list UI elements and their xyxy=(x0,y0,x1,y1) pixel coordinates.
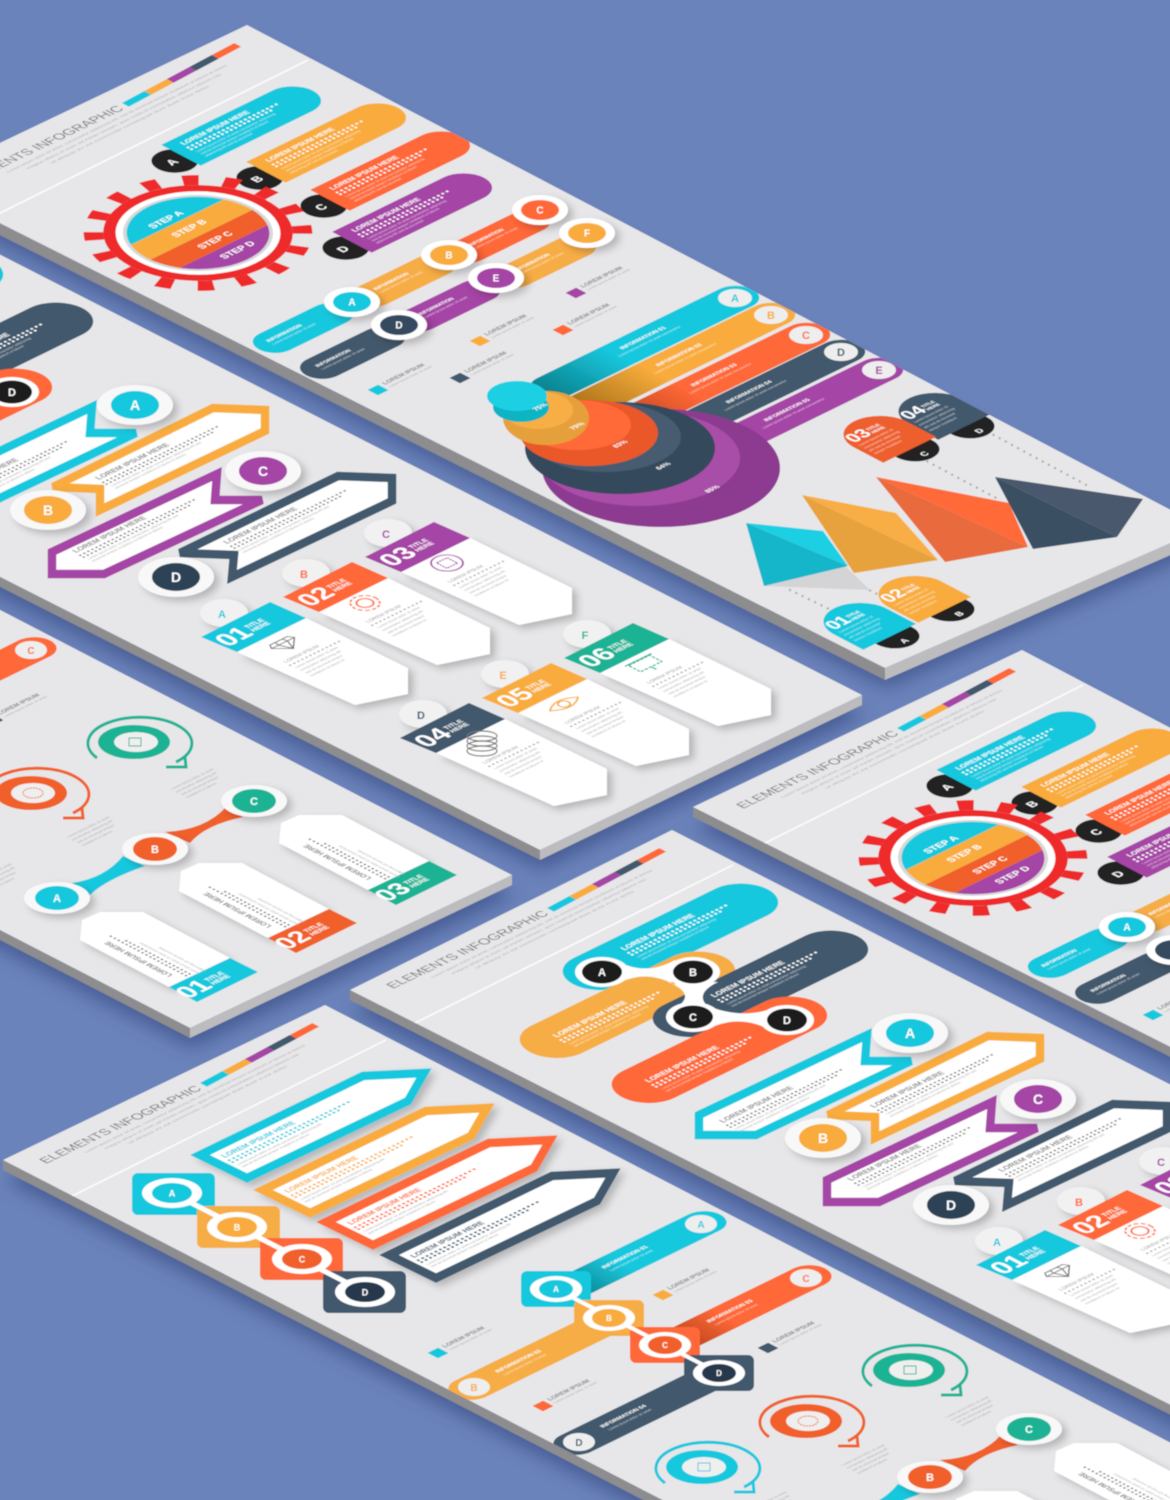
arrow banners xyxy=(200,1073,613,1278)
information bars: INFORMATION 04 xyxy=(599,1404,649,1429)
legends: Lorem ipsum dolor sit amet xyxy=(447,1328,494,1351)
pill: B: adipiscing elit sed do eiusmod xyxy=(288,149,339,174)
ribbons: Lorem ipsum dolor sit amet xyxy=(319,347,367,370)
card 06: 06 xyxy=(570,644,623,671)
card 05 xyxy=(481,660,689,766)
ribbon badges: A xyxy=(348,298,356,308)
card 05: HERE xyxy=(530,682,554,694)
tags: elit sed do eiusmod xyxy=(922,412,957,429)
pill: A xyxy=(136,80,333,178)
information bars: C xyxy=(802,1274,810,1285)
card 04: sed do eiusmod tempor xyxy=(502,755,544,775)
information bars: A xyxy=(697,1220,705,1231)
card 02: B xyxy=(300,569,308,581)
pill: A: adipiscing elit sed do eiusmod xyxy=(203,132,254,157)
panel: right sheet xyxy=(732,668,1170,1285)
tags: TITLE xyxy=(865,423,883,432)
tags: tempor incididunt xyxy=(927,416,959,432)
ribbons: INFORMATION xyxy=(265,324,304,343)
information bars: Lorem ipsum dolor sit amet consectetur xyxy=(722,379,789,411)
card 03: 03 xyxy=(371,543,424,570)
legends: Lorem ipsum dolor sit amet xyxy=(777,1323,824,1346)
card 03 xyxy=(364,519,572,625)
legends: LOREM IPSUM xyxy=(546,1379,592,1402)
card 01: LOREM IPSUM xyxy=(282,644,322,664)
tags: HERE xyxy=(870,425,888,434)
captions: Lorem ipsum dolor sit amet xyxy=(943,1395,991,1418)
information bars: INFORMATION 01 xyxy=(601,1245,651,1270)
card 02: 02 xyxy=(289,583,342,610)
tags: B xyxy=(952,610,967,618)
ribbons: INFORMATION xyxy=(417,297,456,316)
pill: C: C xyxy=(312,202,332,212)
banner: B xyxy=(53,408,265,510)
tags: elit sed do eiusmod xyxy=(902,595,937,612)
card 06: sed do eiusmod tempor xyxy=(666,675,708,695)
connector A-B-C: B xyxy=(926,1472,934,1484)
card 04: Lorem ipsum dolor sit amet xyxy=(492,746,539,770)
tags: TITLE xyxy=(900,583,918,592)
tags: 04 xyxy=(894,403,932,422)
circle arrow: cyan xyxy=(656,1442,760,1492)
card 02: TITLE xyxy=(325,578,349,590)
card 01: Lorem ipsum dolor sit amet xyxy=(293,645,340,669)
header block xyxy=(0,43,308,220)
banner: A xyxy=(0,407,136,507)
card 02 xyxy=(282,559,490,665)
banner: D: eiusmod tempor incididunt ut labore et dolore xyxy=(241,517,315,553)
ribbons: INFORMATION xyxy=(314,349,353,368)
ribbons xyxy=(244,206,605,383)
pill: A: sed do eiusmod tempor incididunt ut labore xyxy=(198,120,270,155)
card 06: LOREM IPSUM xyxy=(645,665,685,685)
captions xyxy=(741,1395,1007,1500)
panel: bottom sheet xyxy=(35,1023,1170,1500)
second diamond chain: A xyxy=(553,1285,559,1294)
card 01: incididunt ut labore et xyxy=(308,658,347,677)
information bars: B xyxy=(767,310,775,322)
information bars: D xyxy=(837,347,845,359)
information bars xyxy=(530,285,904,442)
pill: D: Lorem ipsum dolor sit amet consectetur adipiscing xyxy=(365,199,448,240)
pill: C: LOREM IPSUM HERE xyxy=(327,154,401,191)
arrow banners: LOREM IPSUM HERE xyxy=(345,1187,424,1226)
banner badges: D xyxy=(171,569,181,585)
legends: Lorem ipsum dolor sit amet xyxy=(387,365,434,388)
captions: sed do eiusmod tempor xyxy=(954,1403,996,1424)
banner: C: LOREM IPSUM HERE xyxy=(70,515,149,554)
dotted connectors xyxy=(790,425,1090,612)
tags: elit sed do eiusmod xyxy=(867,435,902,452)
card 05: incididunt ut labore et xyxy=(589,719,628,738)
tags: elit sed do eiusmod xyxy=(847,622,882,639)
arrow banners: sed do eiusmod tempor incididunt ut labore xyxy=(429,1233,500,1268)
tags: tempor incididunt xyxy=(872,439,904,455)
gear: STEP D xyxy=(217,240,259,261)
tags: HERE xyxy=(925,402,943,411)
reversed card 02 xyxy=(954,1491,1132,1500)
second diamond chain xyxy=(521,1271,754,1391)
card 03: sed do eiusmod tempor xyxy=(467,574,509,594)
information bars: Lorem ipsum dolor sit amet xyxy=(713,1302,760,1326)
card 05: LOREM IPSUM xyxy=(563,705,603,725)
information bars: Lorem ipsum dolor sit amet xyxy=(608,1248,655,1272)
tags: tempor incididunt xyxy=(852,626,884,642)
card 06 xyxy=(563,620,771,726)
pill: D: sed do eiusmod tempor incididunt ut labore xyxy=(369,207,441,242)
captions: sed do eiusmod tempor xyxy=(850,1451,892,1472)
card 04 xyxy=(399,700,607,806)
card 03: incididunt ut labore et xyxy=(472,578,511,597)
arrow banners: sed do eiusmod tempor incididunt ut labore xyxy=(240,1133,311,1168)
legends: LOREM IPSUM xyxy=(463,351,509,374)
card 05: 05 xyxy=(488,684,541,711)
banner: B: LOREM IPSUM HERE xyxy=(93,442,172,481)
arrow banners: LOREM IPSUM HERE xyxy=(219,1120,298,1159)
connector A-B-C: C xyxy=(1025,1424,1033,1436)
tags: Lorem ipsum dolor sit xyxy=(837,614,875,634)
pill: A: A xyxy=(163,157,183,167)
ribbons: Lorem ipsum dolor sit amet xyxy=(518,251,566,275)
tags: D xyxy=(972,427,987,435)
banner: C xyxy=(52,474,262,574)
pill: D: D xyxy=(334,245,353,254)
captions: consectetur adipiscing elit xyxy=(949,1399,994,1421)
stacked cylinders xyxy=(487,381,780,527)
card 02: LOREM IPSUM xyxy=(364,604,404,624)
ribbons: INFORMATION xyxy=(467,228,506,247)
card 01: consectetur adipiscing elit xyxy=(298,649,343,672)
tags: consectetur adipiscing xyxy=(897,590,936,609)
arrow banners: Lorem ipsum dolor sit amet consectetur adipiscing elit xyxy=(298,1157,387,1201)
banner: C: Lorem ipsum dolor sit amet consectetur adipiscing elit sed xyxy=(85,514,180,560)
pill: B: sed do eiusmod tempor incididunt ut labore xyxy=(283,137,355,172)
card 04: consectetur adipiscing elit xyxy=(497,750,542,773)
tags: HERE xyxy=(850,612,868,621)
card 06: Lorem ipsum dolor sit amet xyxy=(656,666,703,690)
card 05: sed do eiusmod tempor xyxy=(584,715,626,735)
panel: middle sheet xyxy=(382,848,1170,1434)
tags: consectetur adipiscing xyxy=(917,407,956,426)
arrow banners: sed do eiusmod tempor incididunt ut labore xyxy=(366,1200,437,1235)
card 02: incididunt ut labore et xyxy=(390,618,429,637)
card 03: TITLE xyxy=(407,538,431,550)
pill: B xyxy=(221,97,418,195)
arrow banners: sed do eiusmod tempor incididunt ut labore xyxy=(303,1168,374,1203)
reversed card 03 xyxy=(1054,1443,1170,1500)
stacked cylinders: 85% xyxy=(704,485,722,494)
diamond chain: D xyxy=(362,1288,369,1298)
circle arrow: orange xyxy=(760,1396,864,1446)
card 02: HERE xyxy=(331,581,355,593)
header block: Lorem ipsum dolor sit amet, consectetur adipiscing elit, sed do eiusmod tempor incididunt ut labore et dolore xyxy=(4,64,229,173)
pill: C: Lorem ipsum dolor sit amet consectetur adipiscing xyxy=(343,157,426,198)
card 04: D xyxy=(417,710,425,722)
information bars: Lorem ipsum dolor sit amet consectetur xyxy=(616,325,683,357)
triangles xyxy=(746,477,1143,590)
information bars: D xyxy=(575,1438,583,1449)
card 06: TITLE xyxy=(606,639,630,651)
banner: D xyxy=(180,476,392,577)
card 02: sed do eiusmod tempor xyxy=(385,614,427,634)
legends: Lorem ipsum dolor sit amet xyxy=(672,1270,719,1293)
card 05: Lorem ipsum dolor sit amet xyxy=(574,706,621,730)
ribbon badges: E xyxy=(493,274,500,284)
ribbons: Lorem ipsum dolor sit amet xyxy=(422,295,470,319)
tags: 01 xyxy=(819,613,856,632)
card 06: F xyxy=(582,630,589,642)
banner: D: LOREM IPSUM HERE xyxy=(221,506,300,545)
ribbons: INFORMATION xyxy=(372,272,411,291)
card 03: consectetur adipiscing elit xyxy=(462,569,507,592)
pill: B: B xyxy=(248,175,267,184)
captions: incididunt ut labore xyxy=(959,1410,993,1427)
card 03: HERE xyxy=(413,541,437,553)
information bars: INFORMATION 03 xyxy=(706,1299,756,1324)
card 01 xyxy=(200,599,408,705)
tags: Lorem ipsum dolor sit xyxy=(912,404,950,424)
card 04: 04 xyxy=(406,724,459,751)
diamond chain: A xyxy=(169,1188,176,1198)
card 01: sed do eiusmod tempor xyxy=(303,654,345,674)
spinner xyxy=(0,329,39,407)
banner badges: C xyxy=(258,463,268,479)
card 01: 01 xyxy=(207,623,260,650)
information bars: Lorem ipsum dolor sit amet xyxy=(501,1353,549,1376)
legends: Lorem ipsum dolor sit amet xyxy=(572,305,619,328)
information bars: INFORMATION 05 xyxy=(763,398,813,422)
information bars: E xyxy=(875,365,883,377)
panel: second sheet xyxy=(0,248,771,806)
stacked cylinders: 75% xyxy=(532,403,550,412)
card 06: consectetur adipiscing elit xyxy=(661,670,706,693)
tags: Lorem ipsum dolor sit xyxy=(892,587,930,607)
second diamond chain: B xyxy=(606,1314,612,1323)
information bars: C xyxy=(802,330,810,342)
second diamond chain: D xyxy=(716,1369,722,1378)
ribbon badges xyxy=(324,195,615,340)
stacked cylinders: 64% xyxy=(655,462,673,471)
ribbon badges: C xyxy=(536,206,544,216)
banner badges xyxy=(10,385,301,597)
banner badges: B xyxy=(43,502,53,518)
diamond chain xyxy=(132,1173,406,1313)
gear: STEP A xyxy=(146,210,187,230)
card 01: TITLE xyxy=(243,618,267,630)
ribbon badges: F xyxy=(584,228,590,240)
tags: consectetur adipiscing xyxy=(862,430,901,449)
information bars: INFORMATION 02 xyxy=(494,1349,544,1374)
card 03: C xyxy=(382,529,390,541)
pill: A: Lorem ipsum dolor sit amet consectetur adipiscing xyxy=(194,112,277,153)
legends: LOREM IPSUM xyxy=(381,363,427,386)
information bars xyxy=(439,1206,841,1460)
captions: Lorem ipsum dolor sit amet xyxy=(839,1443,887,1466)
legends: Lorem ipsum dolor sit amet xyxy=(585,268,632,291)
card 04: incididunt ut labore et xyxy=(507,759,546,778)
legends: LOREM IPSUM xyxy=(566,303,612,326)
banner: B: Lorem ipsum dolor sit amet consectetur adipiscing elit sed xyxy=(108,441,203,487)
header block: magna aliqua ut enim ad minim veniam, quis nostrud exercitation ullamco laboris nisi xyxy=(25,73,223,170)
legends: Lorem ipsum dolor sit amet xyxy=(469,353,516,376)
tags: HERE xyxy=(905,585,923,594)
header block: ut aliquip ex ea commodo consequat duis aute irure dolor xyxy=(48,84,212,164)
banner: D: Lorem ipsum dolor sit amet consectetur adipiscing elit sed xyxy=(236,505,331,551)
card 02: consectetur adipiscing elit xyxy=(380,609,425,632)
ribbons: Lorem ipsum dolor sit amet xyxy=(472,226,520,250)
tags: 02 xyxy=(874,586,911,605)
tags xyxy=(822,392,995,650)
pill: C: sed do eiusmod tempor incididunt ut labore xyxy=(347,165,419,200)
pill: B: Lorem ipsum dolor sit amet consectetur adipiscing xyxy=(279,129,362,170)
captions: consectetur adipiscing elit xyxy=(845,1447,890,1469)
circle arrows and connector xyxy=(656,1345,1170,1500)
information bars: Lorem ipsum dolor sit amet consectetur xyxy=(760,397,827,429)
tags: 03 xyxy=(839,426,876,445)
tags: C xyxy=(917,450,932,458)
pill: A: LOREM IPSUM HERE xyxy=(178,109,252,146)
pill: B: LOREM IPSUM HERE xyxy=(263,126,337,163)
gear xyxy=(28,147,368,319)
card 05: TITLE xyxy=(524,679,548,691)
connector A-B-C xyxy=(799,1413,1062,1500)
panel: left sheet xyxy=(0,445,457,1002)
tags: Lorem ipsum dolor sit xyxy=(857,427,895,447)
arrow banners: Lorem ipsum dolor sit amet consectetur adipiscing elit xyxy=(424,1222,513,1266)
legends: Lorem ipsum dolor sit amet xyxy=(489,316,536,339)
ribbons: Lorem ipsum dolor sit amet xyxy=(270,322,318,345)
information bars: A xyxy=(731,293,739,305)
pill: D: LOREM IPSUM HERE xyxy=(349,196,423,233)
arrow banners: LOREM IPSUM HERE xyxy=(282,1155,361,1194)
legends: Lorem ipsum dolor sit amet xyxy=(552,1381,599,1404)
legends: LOREM IPSUM xyxy=(579,266,625,289)
tags: tempor incididunt xyxy=(907,599,939,615)
ribbons: Lorem ipsum dolor sit amet xyxy=(377,270,425,294)
tags: TITLE xyxy=(845,610,863,619)
information bars: Lorem ipsum dolor sit amet xyxy=(606,1408,654,1431)
card 02: Lorem ipsum dolor sit amet xyxy=(375,605,422,629)
card 06: HERE xyxy=(612,642,636,654)
legends: LOREM IPSUM xyxy=(483,314,529,337)
legends xyxy=(427,1266,825,1411)
tags: TITLE xyxy=(920,400,938,409)
card 05: E xyxy=(499,670,507,682)
information bars: INFORMATION 01 xyxy=(619,326,669,350)
banner: C: eiusmod tempor incididunt ut labore et dolore xyxy=(90,526,164,562)
banner: B: eiusmod tempor incididunt ut labore et dolore xyxy=(113,453,187,489)
diamond chain: C xyxy=(299,1254,306,1264)
banner badges: A xyxy=(130,397,140,413)
pill: C: adipiscing elit sed do eiusmod xyxy=(352,177,403,202)
ribbon badges: D xyxy=(395,320,403,332)
information bars: INFORMATION 04 xyxy=(725,380,775,404)
spinner: D xyxy=(8,387,16,399)
card 04: LOREM IPSUM xyxy=(481,745,521,765)
tags: A xyxy=(897,637,912,645)
information bars: INFORMATION 03 xyxy=(690,363,740,387)
information bars: B xyxy=(470,1383,478,1394)
arrow banners: Lorem ipsum dolor sit amet consectetur adipiscing elit xyxy=(235,1122,324,1166)
card 01: HERE xyxy=(249,621,273,633)
panel: top sheet xyxy=(0,43,1143,660)
legends xyxy=(367,264,633,395)
tags: consectetur adipiscing xyxy=(842,617,881,636)
gear: STEP B xyxy=(169,218,210,239)
second diamond chain: C xyxy=(662,1341,668,1350)
stacked cylinders: 83% xyxy=(612,440,630,449)
stacked cylinders: 79% xyxy=(569,422,587,431)
card 01: A xyxy=(218,609,226,621)
pill: D: adipiscing elit sed do eiusmod xyxy=(374,219,425,244)
card 03: LOREM IPSUM xyxy=(446,564,486,584)
legends: LOREM IPSUM xyxy=(441,1326,487,1349)
pill: D xyxy=(307,167,504,265)
card 04: HERE xyxy=(448,722,472,734)
arrow banners: Lorem ipsum dolor sit amet consectetur adipiscing elit xyxy=(361,1189,450,1233)
information bars: INFORMATION 02 xyxy=(655,343,705,367)
captions: incididunt ut labore xyxy=(855,1458,889,1475)
legends: LOREM IPSUM xyxy=(666,1268,712,1291)
card 04: TITLE xyxy=(442,719,466,731)
information bars: Lorem ipsum dolor sit amet consectetur xyxy=(687,362,754,394)
ribbons: INFORMATION xyxy=(513,253,552,272)
pill: C xyxy=(285,125,482,223)
spinner pills xyxy=(0,248,108,483)
card 03: Lorem ipsum dolor sit amet xyxy=(457,565,504,589)
arrow banners: LOREM IPSUM HERE xyxy=(408,1220,487,1259)
gear: STEP C xyxy=(195,230,236,251)
legends: LOREM IPSUM xyxy=(771,1321,817,1344)
card 06: incididunt ut labore et xyxy=(671,679,710,698)
diamond chain: B xyxy=(234,1222,241,1232)
information bars: Lorem ipsum dolor sit amet consectetur xyxy=(652,342,719,374)
ribbon badges: B xyxy=(445,250,453,262)
card 05: consectetur adipiscing elit xyxy=(579,710,624,733)
circle arrow: teal xyxy=(863,1345,967,1395)
